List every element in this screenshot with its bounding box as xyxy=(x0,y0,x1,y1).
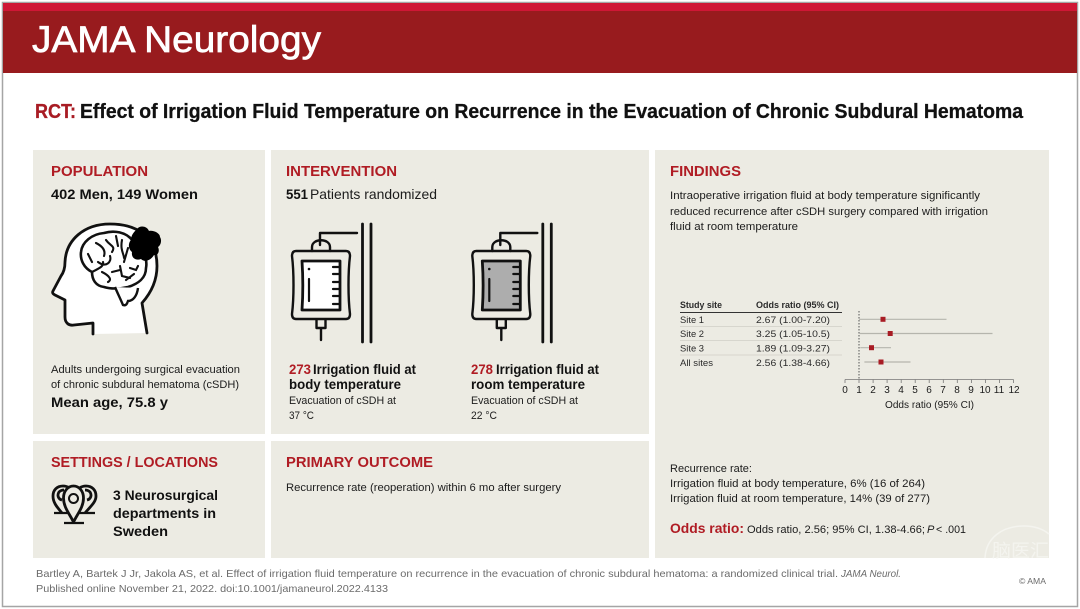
forest plot table: 3.25 (1.05-10.5) xyxy=(756,329,830,339)
panel: findings xyxy=(655,150,1049,561)
forest plot table: Site 2 xyxy=(680,329,704,339)
settings text: 3 Neurosurgical xyxy=(113,487,218,503)
icon: IV bag room temperature xyxy=(472,224,551,342)
forest plot chart: 9 xyxy=(968,385,974,396)
forest plot chart: 2 xyxy=(870,385,876,396)
body temperature arm text: Evacuation of cSDH at xyxy=(289,395,396,407)
forest plot table: Site 1 xyxy=(680,315,704,325)
room temperature arm text: 22 °C xyxy=(471,410,497,422)
primary outcome heading: PRIMARY OUTCOME xyxy=(286,455,433,471)
panel: population xyxy=(33,150,265,434)
forest plot table: All sites xyxy=(680,358,714,368)
body temperature arm text: body temperature xyxy=(289,377,401,392)
settings heading: SETTINGS / LOCATIONS xyxy=(51,455,218,471)
population description xyxy=(51,364,240,391)
forest plot chart: 0 xyxy=(842,385,848,396)
population heading: POPULATION xyxy=(51,164,148,180)
primary outcome text: Recurrence rate (reoperation) within 6 mo after surgery xyxy=(286,482,561,494)
odds ratio result: Odds ratio: xyxy=(670,520,744,536)
body temperature arm text: Irrigation fluid at xyxy=(313,362,416,377)
icon: location pins xyxy=(53,486,96,523)
forest plot table: 2.67 (1.00-7.20) xyxy=(756,315,830,325)
odds ratio result: < .001 xyxy=(936,524,966,536)
findings summary xyxy=(670,190,988,233)
mean age: Mean age, 75.8 y xyxy=(51,394,168,410)
watermark xyxy=(985,526,1049,561)
population description: Adults undergoing surgical evacuation xyxy=(51,364,240,376)
forest plot table: Site 3 xyxy=(680,344,704,354)
forest plot table: 2.56 (1.38-4.66) xyxy=(756,358,830,368)
room temperature arm text: room temperature xyxy=(471,377,585,392)
forest plot chart: 5 xyxy=(912,385,918,396)
citation xyxy=(36,568,901,595)
forest plot chart: 7 xyxy=(940,385,946,396)
room temperature arm text xyxy=(471,362,599,422)
odds ratio result xyxy=(670,520,966,536)
body temperature arm text: 273 xyxy=(289,362,311,377)
room temperature arm text: Evacuation of cSDH at xyxy=(471,395,578,407)
recurrence rate text: Irrigation fluid at room temperature, 14% (39 of 277) xyxy=(670,493,930,505)
header banner xyxy=(3,3,1077,73)
body temperature arm text: 37 °C xyxy=(289,410,314,422)
forest plot chart: 4 xyxy=(898,385,904,396)
forest plot chart: 1 xyxy=(856,385,862,396)
odds ratio result: Odds ratio, 2.56; 95% CI, 1.38-4.66; xyxy=(747,524,925,536)
settings text xyxy=(113,487,218,539)
population count: 402 Men, 149 Women xyxy=(51,186,198,202)
settings text: Sweden xyxy=(113,523,168,539)
settings text: departments in xyxy=(113,505,216,521)
patients randomized: 551 xyxy=(286,186,308,202)
odds ratio result: P xyxy=(927,524,935,536)
population description: of chronic subdural hematoma (cSDH) xyxy=(51,379,239,391)
forest plot chart xyxy=(842,311,1020,411)
findings summary: Intraoperative irrigation fluid at body temperature significantly xyxy=(670,190,981,202)
forest plot chart: 10 xyxy=(979,385,991,396)
recurrence rate text: Recurrence rate: xyxy=(670,463,752,475)
panel: intervention xyxy=(271,150,649,434)
citation: Published online November 21, 2022. doi:10.1001/jamaneurol.2022.4133 xyxy=(36,583,388,595)
watermark: 脑医汇 xyxy=(992,541,1049,561)
recurrence rate text: Irrigation fluid at body temperature, 6% (16 of 264) xyxy=(670,478,925,490)
forest plot table: Study site xyxy=(680,300,722,310)
citation: JAMA Neurol. xyxy=(840,568,901,580)
forest plot chart: Odds ratio (95% CI) xyxy=(885,400,974,411)
panel: primary outcome xyxy=(271,441,649,558)
intervention heading: INTERVENTION xyxy=(286,164,397,180)
forest plot chart: 3 xyxy=(884,385,890,396)
forest plot table: 1.89 (1.09-3.27) xyxy=(756,344,830,354)
recurrence rate text xyxy=(670,463,930,505)
patients randomized: Patients randomized xyxy=(310,186,437,202)
icon: head with brain and hematoma xyxy=(53,224,161,334)
icon: IV bag body temperature xyxy=(292,224,371,342)
citation: Bartley A, Bartek J Jr, Jakola AS, et al. Effect of irrigation fluid temperature on recurrence in the evacuation of chronic subdural hematoma: a randomized clinical trial. xyxy=(36,568,838,580)
findings summary: reduced recurrence after cSDH surgery compared with irrigation xyxy=(670,206,988,218)
title: RCT: xyxy=(35,101,76,123)
findings heading: FINDINGS xyxy=(670,164,741,180)
findings summary: fluid at room temperature xyxy=(670,221,798,233)
forest plot table xyxy=(680,300,842,368)
room temperature arm text: 278 xyxy=(471,362,493,377)
panel: settings and locations xyxy=(33,441,265,558)
forest plot table: Odds ratio (95% CI) xyxy=(756,300,839,310)
forest plot chart: 8 xyxy=(954,385,960,396)
forest plot chart: 11 xyxy=(994,385,1005,396)
title: Effect of Irrigation Fluid Temperature on Recurrence in the Evacuation of Chronic Subdural Hematoma xyxy=(80,101,1024,123)
body temperature arm text xyxy=(289,362,416,422)
forest plot chart: 12 xyxy=(1008,385,1020,396)
header banner: JAMA Neurology xyxy=(32,19,322,60)
room temperature arm text: Irrigation fluid at xyxy=(496,362,599,377)
forest plot chart: 6 xyxy=(926,385,932,396)
copyright: © AMA xyxy=(1019,576,1046,586)
